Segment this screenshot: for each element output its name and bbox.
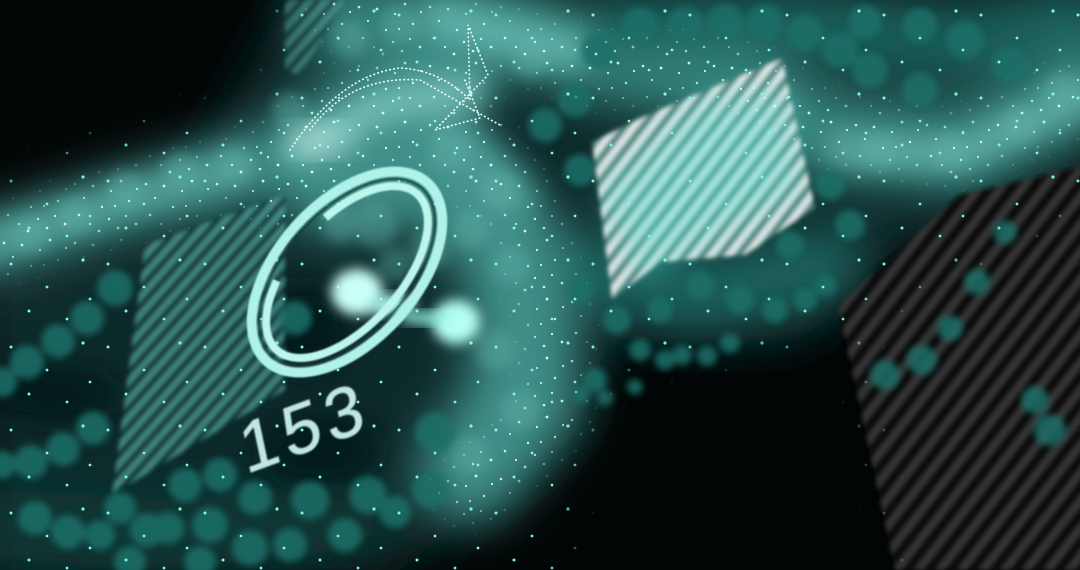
icon: tilted target ring [215, 137, 479, 407]
panel: hatched diamond center [592, 58, 815, 300]
counter value: 153 [233, 365, 376, 489]
panel: hatched shape right gray [838, 165, 1080, 570]
icon: bright glow spots [284, 126, 480, 344]
icon: dotted star trail [290, 25, 500, 150]
panel: dark pockets inside the haze [0, 285, 380, 485]
panel: hatched shape left teal [112, 0, 345, 495]
